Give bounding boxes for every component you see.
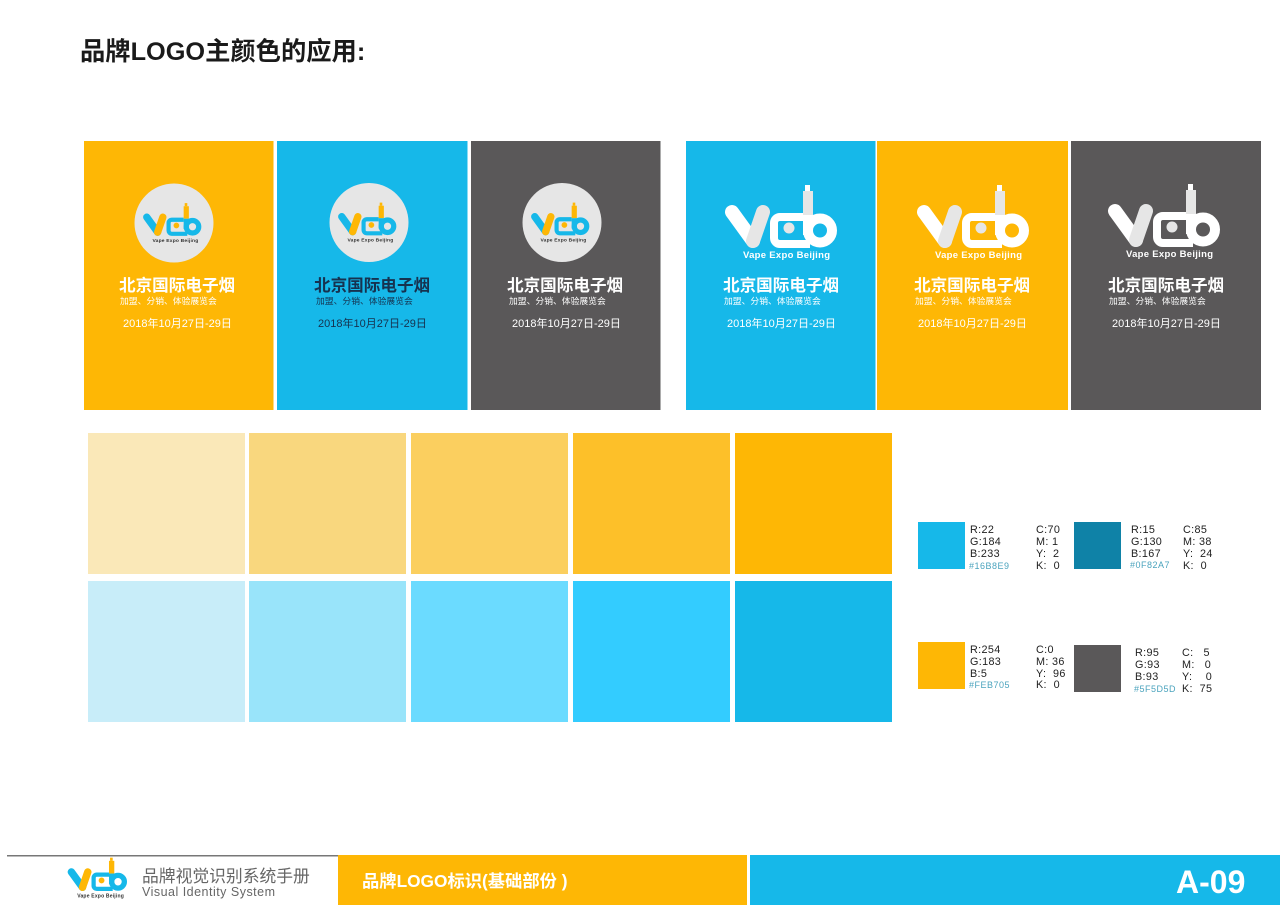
colour spec: blue: #16B8E9 [969,561,1010,571]
icon: white VEB logo [1115,184,1215,260]
icon: VEB logo [535,203,587,244]
colour spec: dark teal: Y: 24 [1183,548,1213,560]
colour spec: orange: G:183 [970,656,1001,668]
colour spec: gray: #5F5D5D [1134,684,1176,694]
colour spec: gray: G:93 [1135,659,1160,671]
colour spec: dark teal: K: 0 [1183,560,1207,572]
icon: footer VEB logo [71,858,124,899]
colour spec: dark teal: B:167 [1131,548,1161,560]
colour spec: blue: M: 1 [1036,536,1058,548]
icon: white VEB logo: Vape Expo Beijing [935,250,1022,261]
colour spec: blue: B:233 [970,548,1000,560]
colour spec: blue: G:184 [970,536,1001,548]
colour spec: orange: R:254 [970,644,1001,656]
colour spec: gray: C: 5 [1182,647,1210,659]
colour spec: blue: Y: 2 [1036,548,1059,560]
footer section title: 品牌LOGO标识(基础部份 ) [362,871,567,891]
colour spec: dark teal: #0F82A7 [1130,560,1170,570]
footer manual subtitle: Visual Identity System [142,885,275,899]
panel: blue card with round logo [277,141,468,410]
colour spec: dark teal: R:15 [1131,524,1155,536]
panel: orange tint swatches [88,433,892,574]
panel: orange card with round logo [84,141,274,410]
panel: gray card with white logo: 北京国际电子烟 [1108,275,1224,295]
icon: VEB logo: Vape Expo Beijing [347,238,393,244]
colour spec: blue: K: 0 [1036,560,1060,572]
colour spec: orange [918,642,1066,691]
icon: white VEB logo [924,185,1024,261]
panel: orange card with white logo [877,141,1068,410]
colour spec: blue: R:22 [970,524,994,536]
colour spec: dark teal: G:130 [1131,536,1162,548]
colour spec: orange: M: 36 [1036,656,1065,668]
page number: A-09 [1176,864,1245,900]
colour spec: blue [918,522,1060,572]
icon: white VEB logo: Vape Expo Beijing [1126,249,1213,260]
footer [7,855,1280,905]
icon: footer VEB logo: Vape Expo Beijing [77,893,124,899]
colour spec: orange: B:5 [970,668,987,680]
panel: orange card with round logo: 2018年10月27日-29日 [123,316,232,330]
icon: VEB logo: Vape Expo Beijing [540,238,586,244]
panel: blue card with white logo: 北京国际电子烟 [723,275,839,295]
colour spec: gray: K: 75 [1182,683,1212,695]
colour spec: gray [1074,645,1212,695]
panel: orange card with white logo: 北京国际电子烟 [914,275,1030,295]
icon: VEB logo: Vape Expo Beijing [152,238,198,244]
panel: gray card with white logo [1071,141,1261,410]
panel: blue card with round logo: 加盟、分销、体验展览会 [316,295,413,306]
colour spec: orange: Y: 96 [1036,668,1066,680]
panel: blue card with white logo: 2018年10月27日-29日 [727,316,836,330]
colour spec: gray: R:95 [1135,647,1159,659]
icon: white VEB logo [732,185,832,261]
colour spec: dark teal: M: 38 [1183,536,1212,548]
panel: blue tint swatches [88,581,892,722]
icon: VEB logo [342,203,394,244]
icon: VEB logo [147,203,199,244]
panel: gray card with white logo: 加盟、分销、体验展览会 [1109,295,1206,306]
footer manual title: 品牌视觉识别系统手册 [142,867,310,886]
colour spec: dark teal [1074,522,1213,572]
colour spec: dark teal: C:85 [1183,524,1207,536]
colour spec: orange: K: 0 [1036,679,1060,691]
colour spec: gray: B:93 [1135,671,1159,683]
panel: blue card with round logo: 北京国际电子烟 [314,275,430,295]
footer blue band [750,855,1280,905]
footer orange band [338,855,747,905]
panel: orange card with round logo: 北京国际电子烟 [119,275,235,295]
panel: blue card with white logo: 加盟、分销、体验展览会 [724,295,821,306]
colour spec: orange: #FEB705 [969,680,1010,690]
panel: gray card with round logo [471,141,660,410]
panel: blue card with white logo [686,141,876,410]
colour spec: blue: C:70 [1036,524,1060,536]
panel: gray card with white logo: 2018年10月27日-29日 [1112,316,1221,330]
colour spec: gray: Y: 0 [1182,671,1212,683]
colour spec: gray: M: 0 [1182,659,1211,671]
panel: gray card with round logo: 北京国际电子烟 [507,275,623,295]
icon: white VEB logo: Vape Expo Beijing [743,250,830,261]
panel: gray card with round logo: 2018年10月27日-29日 [512,316,621,330]
panel: orange card with white logo: 加盟、分销、体验展览会 [915,295,1012,306]
panel: orange card with white logo: 2018年10月27日-29日 [918,316,1027,330]
panel: blue card with round logo: 2018年10月27日-29日 [318,316,427,330]
colour spec: orange: C:0 [1036,644,1054,656]
title: 品牌LOGO主颜色的应用: [80,37,365,66]
panel: orange card with round logo: 加盟、分销、体验展览会 [120,295,217,306]
panel: gray card with round logo: 加盟、分销、体验展览会 [509,295,606,306]
